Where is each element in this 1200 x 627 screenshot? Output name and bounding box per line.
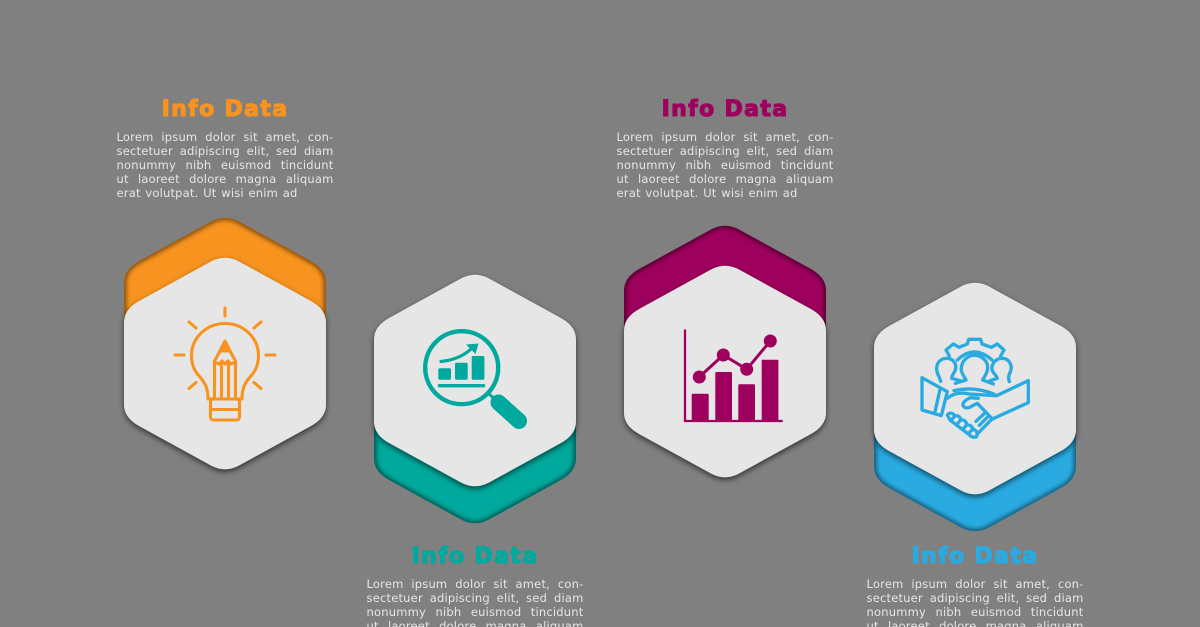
icon: bar and line chart [685,330,783,421]
white front hexagon [874,283,1076,494]
magenta back hexagon [624,226,826,330]
text block: orange description: sectetuer adipiscing elit, sed diam [116,144,334,158]
panel: blue hexagon [874,283,1076,531]
icon: handshake with team and gear [922,339,1028,437]
text block: magenta description: Lorem ipsum dolor sit amet, con- [616,130,834,144]
text block: orange description [116,130,334,200]
text block: blue description: Lorem ipsum dolor sit amet, con- [866,577,1084,591]
white front hexagon [124,258,326,469]
text block: magenta description: nonummy nibh euismod tincidunt [616,158,834,172]
white front hexagon [374,275,576,486]
text block: magenta description: ut laoreet dolore magna aliquam [616,172,834,186]
infographic artwork: hexagons and icons [120,218,1080,532]
heading: orange Info Data: Info Data [162,96,288,122]
text block: orange description: nonummy nibh euismod tincidunt [116,158,334,172]
heading: magenta Info Data: Info Data [662,96,788,122]
orange back hexagon [124,218,326,322]
text block: teal description: nonummy nibh euismod tincidunt [366,605,584,619]
text block: orange description: ut laoreet dolore magna aliquam [116,172,334,186]
icon: magnifier with rising bars [425,331,519,421]
teal back hexagon [374,422,576,524]
heading: teal Info Data: Info Data [412,544,538,568]
text block: blue description [866,577,1084,627]
icon: light bulb with pencil [175,308,275,420]
white front hexagon [624,266,826,477]
blue back hexagon [874,430,1076,532]
text block: teal description: Lorem ipsum dolor sit amet, con- [366,577,584,591]
panel: teal hexagon [374,275,576,523]
text block: teal description [366,577,584,627]
text block: blue description: nonummy nibh euismod tincidunt [866,605,1084,619]
panel: magenta hexagon [624,226,826,477]
text block: magenta description: erat volutpat. Ut wisi enim ad [616,186,798,200]
text block: magenta description: sectetuer adipiscing elit, sed diam [616,144,834,158]
text block: teal description: sectetuer adipiscing elit, sed diam [366,591,584,605]
panel: orange hexagon [124,218,326,469]
text block: magenta description [616,130,834,200]
heading: blue Info Data: Info Data [912,544,1038,568]
text block: blue description: sectetuer adipiscing elit, sed diam [866,591,1084,605]
text block: orange description: Lorem ipsum dolor sit amet, con- [116,130,334,144]
text block: orange description: erat volutpat. Ut wisi enim ad [116,186,298,200]
